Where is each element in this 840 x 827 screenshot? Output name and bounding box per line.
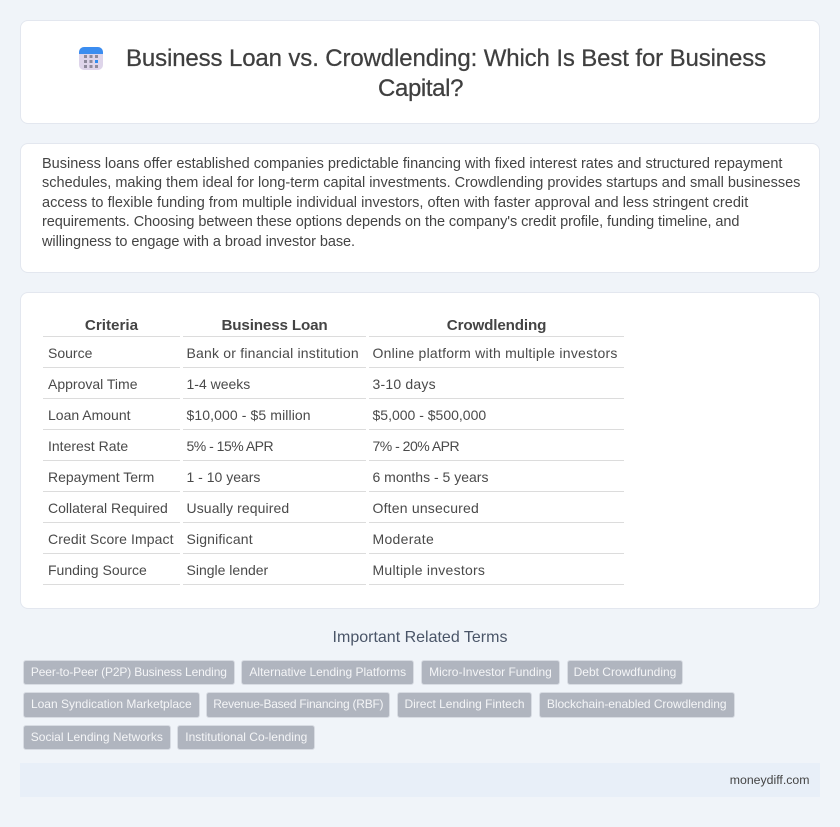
text block: introduction: Business loans offer established companies predictable financing with fixed interest rates and structured repayment: [42, 156, 782, 172]
comparison table: Source: [48, 345, 92, 361]
panel: intro card: [20, 143, 820, 273]
tag list: related terms: Debt Crowdfunding: [574, 665, 676, 679]
icon: calendar: [79, 47, 103, 70]
comparison table: 1-4 weeks: [186, 376, 250, 392]
text block: introduction: [42, 156, 800, 250]
comparison table: Collateral Required: [48, 500, 168, 516]
comparison table: Loan Amount: [48, 407, 131, 423]
comparison table: Significant: [186, 531, 253, 547]
comparison table: 6 months - 5 years: [372, 469, 488, 485]
comparison table: $5,000 - $500,000: [372, 407, 486, 423]
comparison table: Criteria: [85, 317, 138, 334]
text block: introduction: requirements. Choosing between these options depends on the company's credit profile, funding timeline, and: [42, 214, 739, 230]
comparison table: 1 - 10 years: [186, 469, 260, 485]
title: [126, 45, 766, 102]
text block: introduction: willingness to engage with a broad investor base.: [42, 234, 355, 250]
comparison table: Multiple investors: [372, 562, 485, 578]
comparison table: Online platform with multiple investors: [372, 345, 618, 361]
tag list: related terms: [23, 660, 735, 750]
tag list: related terms: Blockchain-enabled Crowdlending: [547, 697, 726, 711]
tag list: related terms: Loan Syndication Marketplace: [31, 697, 192, 711]
comparison table: Usually required: [186, 500, 289, 516]
comparison table: 7% - 20% APR: [372, 438, 459, 454]
panel: title card: [20, 20, 820, 124]
tag list: related terms: Direct Lending Fintech: [404, 697, 525, 711]
heading: related terms: Important Related Terms: [333, 629, 507, 646]
comparison table: [43, 317, 624, 585]
comparison table: 5% - 15% APR: [186, 438, 273, 454]
tag list: related terms: Alternative Lending Platforms: [249, 665, 406, 679]
comparison table: Often unsecured: [372, 500, 479, 516]
tag list: related terms: Social Lending Networks: [31, 730, 163, 744]
comparison table: Interest Rate: [48, 438, 128, 454]
tag list: related terms: Revenue-Based Financing (RBF): [213, 697, 383, 711]
tag list: related terms: Peer-to-Peer (P2P) Business Lending: [31, 665, 227, 679]
comparison table: Repayment Term: [48, 469, 154, 485]
comparison table: $10,000 - $5 million: [186, 407, 311, 423]
comparison table: Credit Score Impact: [48, 531, 174, 547]
comparison table: Moderate: [372, 531, 434, 547]
title: Capital?: [378, 75, 463, 102]
panel: comparison table card: [20, 292, 820, 609]
tag list: related terms: Institutional Co-lending: [185, 730, 307, 744]
comparison table: Funding Source: [48, 562, 147, 578]
tag list: related terms: Micro-Investor Funding: [429, 665, 552, 679]
comparison table: Single lender: [186, 562, 268, 578]
comparison table: Approval Time: [48, 376, 137, 392]
comparison table: Business Loan: [221, 317, 328, 334]
footer source label: moneydiff.com: [730, 773, 810, 787]
text block: introduction: schedules, making them ideal for long-term capital investments. Crowdlending provides startups and small businesses: [42, 175, 800, 191]
comparison table: Crowdlending: [447, 317, 546, 334]
text block: introduction: access to flexible funding from multiple individual investors, often with faster approval and less stringent credit: [42, 194, 748, 210]
comparison table: Bank or financial institution: [186, 345, 359, 361]
footer bar: [20, 763, 820, 797]
title: Business Loan vs. Crowdlending: Which Is Best for Business: [126, 45, 766, 72]
comparison table: 3-10 days: [372, 376, 436, 392]
